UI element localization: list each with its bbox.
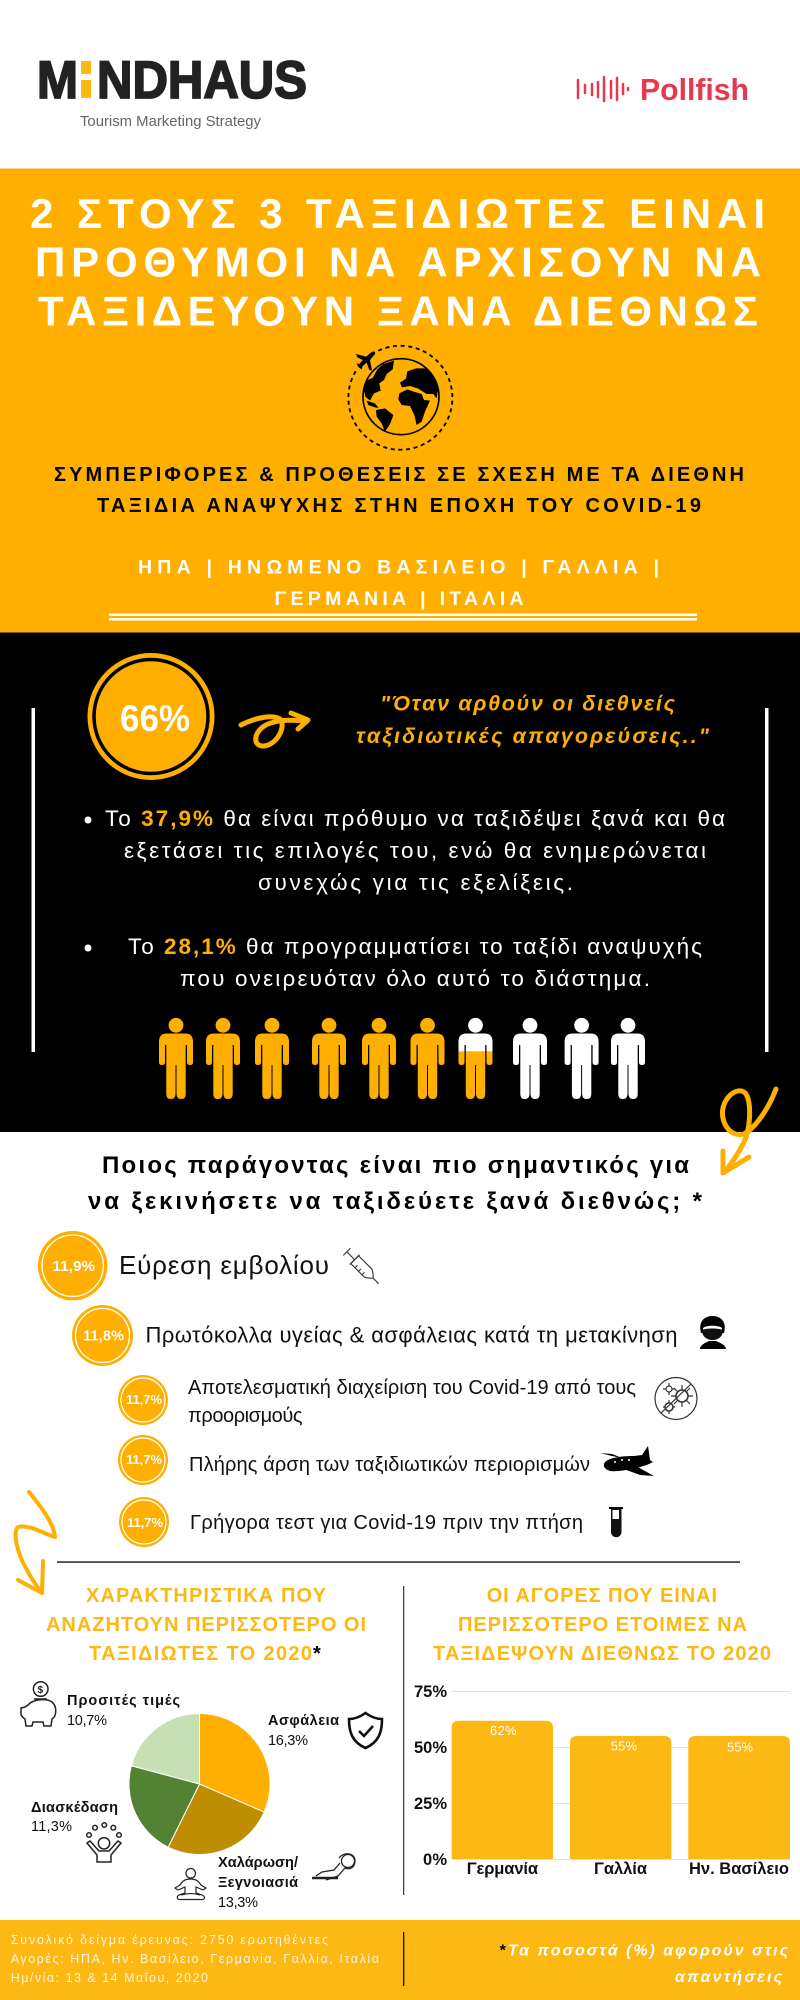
bar chart: 0% [423, 1851, 447, 1869]
panel: bar chart of ready markets [414, 1585, 790, 1878]
pictogram: 10 people, 6.6 highlighted [159, 1018, 645, 1099]
item: lifting restrictions [118, 1435, 654, 1485]
item: rapid tests: Γρήγορα τεστ για Covid-19 πριν την πτήση [190, 1512, 583, 1534]
header: logos [37, 51, 749, 130]
heading: ΤΑΞΙΔΕΨΟΥΝ ΔΙΕΘΝΩΣ ΤΟ 2020 [433, 1643, 771, 1665]
heading: ΟΙ ΑΓΟΡΕΣ ΠΟΥ ΕΙΝΑΙ [487, 1585, 717, 1607]
icon: globe with plane [348, 346, 452, 450]
heading [433, 1585, 771, 1665]
icon: reclining person [312, 1854, 355, 1880]
icon: juggling person [87, 1823, 121, 1862]
countries list: ΗΠΑ | ΗΝΩΜΕΝΟ ΒΑΣΙΛΕΙΟ | ΓΑΛΛΙΑ | [138, 556, 659, 578]
label: relaxation: Χαλάρωση/ [218, 1855, 298, 1871]
icon: airplane [600, 1446, 654, 1476]
item: covid management [118, 1375, 697, 1427]
item: lifting restrictions: Πλήρης άρση των ταξιδιωτικών περιορισμών [189, 1454, 590, 1476]
item: covid management: 11,7% [126, 1392, 162, 1407]
label: entertainment: Διασκέδαση [31, 1800, 118, 1816]
heading: * [313, 1643, 321, 1665]
title [30, 190, 765, 335]
item: rapid tests: 11,7% [127, 1515, 163, 1530]
survey details: Συνολικό δείγμα έρευνας: 2750 ερωτηθέντες [11, 1933, 328, 1947]
icon: crossed virus [655, 1378, 697, 1420]
label: affordable prices [67, 1693, 180, 1729]
item: lifting restrictions: 11,7% [126, 1452, 162, 1467]
item: rapid tests [119, 1497, 623, 1547]
survey details: Ημ/νία: 13 & 14 Μαΐου, 2020 [11, 1971, 208, 1985]
bar: France 55% [570, 1736, 671, 1878]
countries list: ΓΕΡΜΑΝΙΑ | ΙΤΑΛΙΑ [274, 588, 524, 610]
heading: ΠΕΡΙΣΣΟΤΕΡΟ ΕΤΟΙΜΕΣ ΝΑ [458, 1614, 747, 1636]
bullet: 37,9%: εξετάσει τις επιλογές του, ενώ θα ενημερώνεται [124, 838, 706, 863]
arrow: curly arrow to question [722, 1089, 776, 1173]
panel: footer [0, 1920, 800, 2000]
label: relaxation: 13,3% [218, 1895, 258, 1911]
logo: Mindhaus: Tourism Marketing Strategy [80, 114, 262, 130]
bullet: 28,1% [84, 934, 702, 991]
heading: question: Ποιος παράγοντας είναι πιο σημαντικός για [102, 1152, 689, 1179]
bullet: 37,9%: Το 37,9% θα είναι πρόθυμο να ταξιδέψει ξανά και θα [105, 806, 725, 831]
icon: shield with check [349, 1713, 382, 1748]
heading: ΑΝΑΖΗΤΟΥΝ ΠΕΡΙΣΣΟΤΕΡΟ ΟΙ [46, 1614, 366, 1636]
bullet: 28,1%: που ονειρευόταν όλο αυτό το διάστημα. [180, 966, 650, 991]
panel: pie chart of traveller characteristics [21, 1585, 382, 1911]
heading: ΤΑΞΙΔΙΩΤΕΣ ΤΟ 2020 [89, 1643, 312, 1665]
bar chart: 75% [414, 1683, 447, 1701]
label: safety: Ασφάλεια [268, 1713, 339, 1729]
item: vaccine [38, 1231, 384, 1300]
logo: Pollfish: Pollfish [640, 72, 749, 107]
stat circle 66%: 66% [120, 698, 190, 739]
bar chart [414, 1683, 790, 1878]
quote: "Όταν αρθούν οι διεθνείς [380, 692, 676, 716]
panel: yellow title banner [0, 168, 800, 632]
survey details [11, 1933, 379, 1985]
footnote: απαντήσεις [675, 1969, 782, 1986]
label: entertainment: 11,3% [31, 1819, 72, 1835]
logo: Mindhaus: M [37, 51, 78, 110]
heading: question: να ξεκινήσετε να ταξιδεύετε ξανά διεθνώς; * [88, 1188, 703, 1215]
label: affordable prices: 10,7% [67, 1713, 107, 1729]
icon: meditating person [175, 1868, 206, 1900]
bar: Germany 62% [452, 1721, 553, 1878]
item: vaccine: 11,9% [52, 1258, 95, 1275]
bar: Germany 62%: Γερμανία [467, 1860, 538, 1878]
footnote: Τα ποσοστά (%) αφορούν στις [508, 1943, 788, 1960]
subtitle: ΣΥΜΠΕΡΙΦΟΡΕΣ & ΠΡΟΘΕΣΕΙΣ ΣΕ ΣΧΕΣΗ ΜΕ ΤΑ ΔΙΕΘΝΗ [54, 464, 744, 486]
subtitle [54, 464, 744, 517]
heading: question [88, 1152, 703, 1215]
panel: black 66% section [0, 632, 800, 1132]
quote: ταξιδιωτικές απαγορεύσεις.." [356, 724, 710, 748]
bullet: 37,9%: συνεχώς για τις εξελίξεις. [258, 870, 573, 895]
bar: Germany 62%: 62% [490, 1723, 517, 1738]
heading: ΧΑΡΑΚΤΗΡΙΣΤΙΚΑ ΠΟΥ [86, 1585, 327, 1607]
bar: France 55%: 55% [611, 1739, 637, 1754]
pie chart [129, 1714, 270, 1854]
label: relaxation [218, 1855, 298, 1911]
logo: Mindhaus [37, 51, 307, 130]
bar: France 55%: Γαλλία [594, 1860, 647, 1878]
bar chart: 50% [414, 1739, 447, 1757]
label: relaxation: Ξεγνοιασιά [218, 1875, 298, 1891]
title: 2 ΣΤΟΥΣ 3 ΤΑΞΙΔΙΩΤΕΣ ΕΙΝΑΙ [30, 190, 765, 237]
countries list [138, 556, 659, 610]
item: health protocols: 11,8% [83, 1328, 124, 1344]
bar: UK 55% [688, 1736, 790, 1878]
title: ΠΡΟΘΥΜΟΙ ΝΑ ΑΡΧΙΣΟΥΝ ΝΑ [35, 239, 761, 286]
item: covid management: Αποτελεσματική διαχείριση του Covid-19 από τους [188, 1377, 636, 1399]
arrow: curly arrow to lower charts [16, 1492, 55, 1593]
bar chart: 25% [414, 1795, 447, 1813]
bar: UK 55%: 55% [727, 1740, 753, 1755]
logo: Pollfish [578, 72, 749, 107]
stat circle 66% [88, 653, 214, 780]
heading [46, 1585, 366, 1665]
icon: test tube [609, 1507, 623, 1537]
bullet: 28,1%: Το 28,1% θα προγραμματίσει το ταξίδι αναψυχής [128, 934, 702, 959]
icon: piggy bank: $ [38, 1685, 44, 1696]
item: health protocols: Πρωτόκολλα υγείας & ασφάλειας κατά τη μετακίνηση [146, 1323, 678, 1348]
subtitle: ΤΑΞΙΔΙΑ ΑΝΑΨΥΧΗΣ ΣΤΗΝ ΕΠΟΧΗ ΤΟΥ COVID-19 [97, 495, 701, 517]
quote [356, 692, 710, 748]
arrow: loop pointing to quote [241, 713, 308, 746]
bullet: 37,9% [84, 806, 725, 895]
footnote: * [499, 1943, 506, 1960]
label: entertainment [31, 1800, 118, 1835]
bar: UK 55%: Ην. Βασίλειο [689, 1860, 789, 1878]
item: vaccine: Εύρεση εμβολίου [119, 1250, 329, 1280]
item: covid management: προορισμούς [188, 1405, 303, 1427]
title: ΤΑΞΙΔΕΥΟΥΝ ΞΑΝΑ ΔΙΕΘΝΩΣ [38, 288, 758, 335]
logo: Mindhaus: NDHAUS [97, 51, 307, 110]
label: safety [268, 1713, 339, 1749]
survey details: Αγορές: ΗΠΑ, Ην. Βασίλειο, Γερμανία, Γαλλία, Ιταλία [11, 1952, 379, 1966]
footnote [499, 1943, 788, 1986]
label: affordable prices: Προσιτές τιμές [67, 1693, 180, 1709]
icon: piggy bank [21, 1682, 56, 1726]
item: health protocols [72, 1305, 726, 1366]
icon: syringe [342, 1247, 384, 1289]
icon: person with mask [700, 1316, 726, 1349]
label: safety: 16,3% [268, 1733, 308, 1749]
panel: important factors [38, 1152, 726, 1547]
